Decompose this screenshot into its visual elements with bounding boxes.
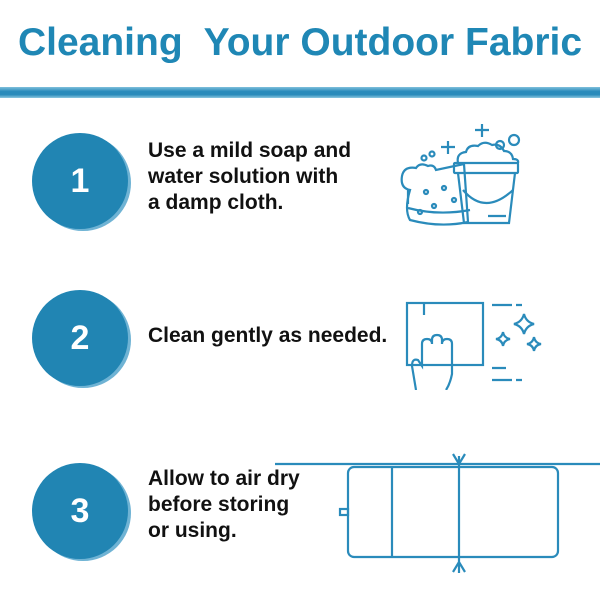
icon: soap bucket sponge: [400, 124, 520, 226]
step 2 circle: [32, 290, 128, 386]
step 1 text: a damp cloth.: [148, 191, 283, 214]
step 3 text: [148, 467, 300, 542]
step 1 circle: [32, 133, 128, 229]
step 3 text: Allow to air dry: [148, 467, 300, 490]
step 1 text: [148, 139, 351, 214]
header bar: [0, 87, 600, 98]
step 3 text: before storing: [148, 493, 289, 516]
step 1 text: Use a mild soap and: [148, 139, 351, 162]
icon: cushion on line: [275, 453, 600, 573]
step 1 text: water solution with: [148, 165, 338, 188]
step 1 circle: 1: [71, 162, 89, 200]
step 3 circle: 3: [71, 492, 89, 530]
step 3 circle: [32, 463, 128, 559]
step 2 text: Clean gently as needed.: [148, 324, 387, 347]
title: Cleaning Your Outdoor Fabric: [18, 21, 582, 64]
icon: hand wiping: [406, 302, 542, 390]
step 2 circle: 2: [71, 319, 89, 357]
step 3 text: or using.: [148, 519, 237, 542]
